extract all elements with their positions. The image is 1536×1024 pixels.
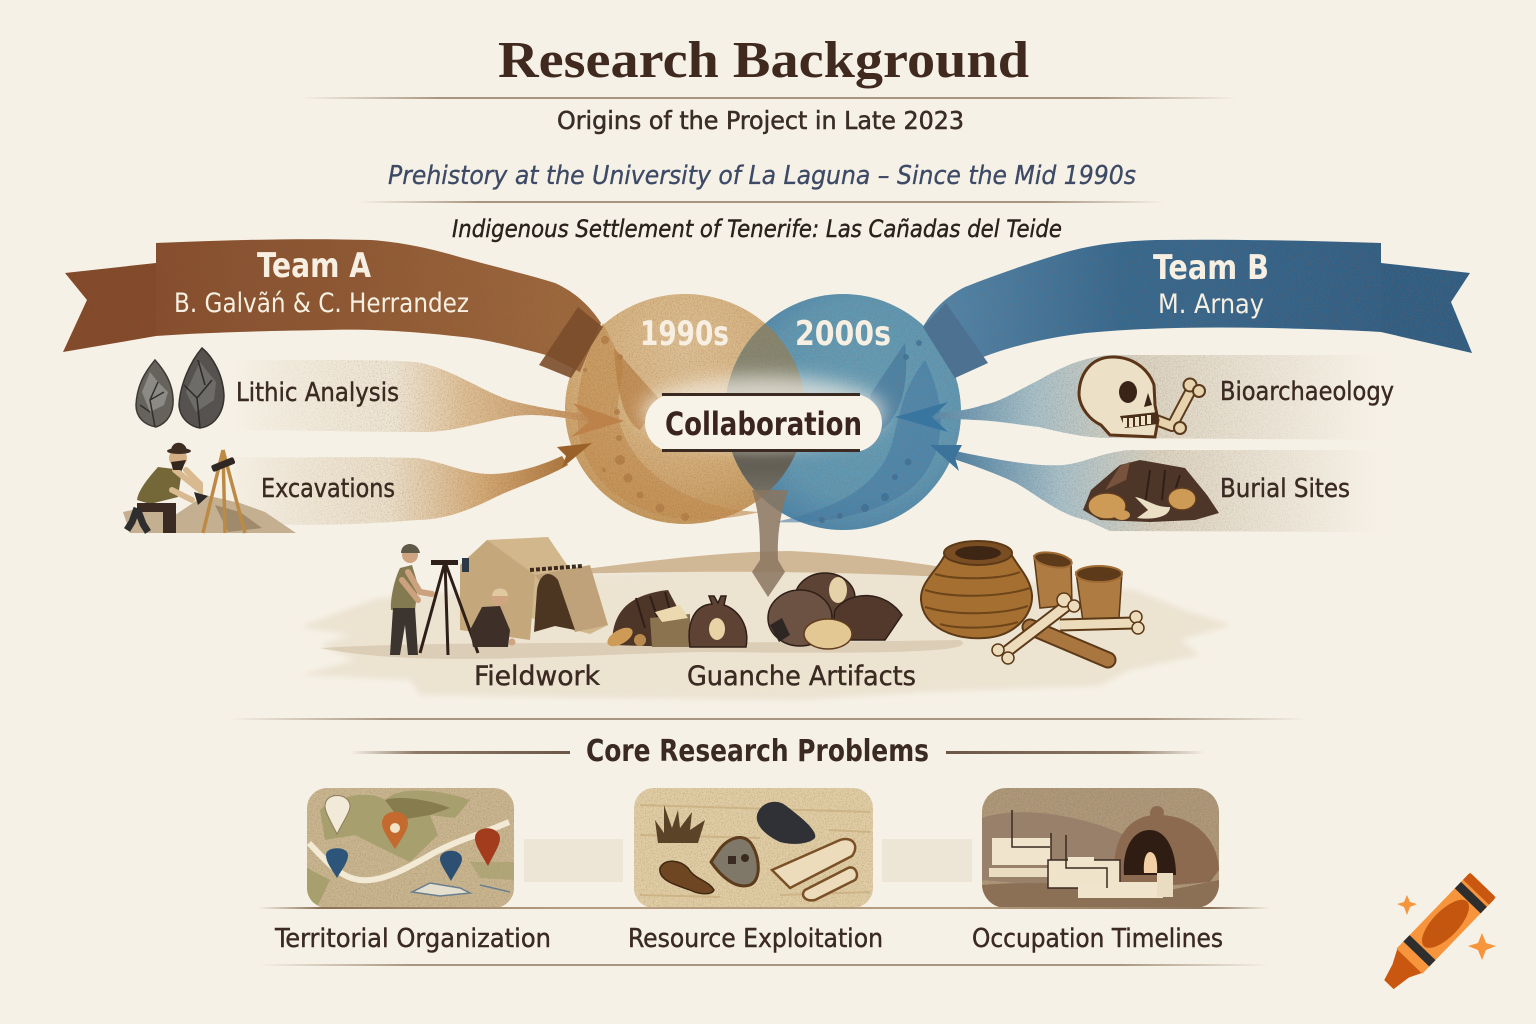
section heading: core research problems: Core Research Problems — [586, 734, 929, 769]
team B name: Team B — [1153, 248, 1269, 288]
map pin: red — [475, 828, 500, 866]
label: resource exploitation: Resource Exploitation — [628, 924, 883, 954]
label: territorial organization: Territorial Organization — [274, 924, 551, 954]
year: 1990s: 1990s — [640, 314, 729, 354]
context line: prehistory at La Laguna: Prehistory at the University of La Laguna – Since the Mid 1990s — [388, 161, 1136, 191]
arrow band: excavations — [234, 443, 592, 525]
subtitle: Origins of the Project in Late 2023 — [557, 106, 964, 135]
icon: burial mound — [1083, 460, 1219, 522]
label: burial sites: Burial Sites — [1220, 474, 1350, 504]
title: Research Background — [498, 32, 1029, 89]
label: bioarchaeology: Bioarchaeology — [1220, 377, 1394, 407]
distant hill — [530, 551, 1005, 580]
right input arrows — [895, 355, 1384, 532]
arrow: collaboration to fieldwork — [752, 490, 788, 597]
left input arrows — [230, 360, 624, 525]
label: guanche artifacts: Guanche Artifacts — [687, 661, 916, 692]
icon: plant — [655, 805, 705, 843]
circle overlap — [726, 324, 804, 497]
sandy ground — [300, 560, 1232, 700]
team B members: M. Arnay — [1158, 289, 1264, 320]
icon: excavating archaeologist — [123, 443, 296, 533]
venn circles — [565, 294, 961, 530]
label: excavations: Excavations — [261, 474, 395, 504]
surveyor with tripod — [390, 544, 478, 655]
arrow band: burial sites — [930, 445, 1384, 532]
map pin: white — [325, 796, 350, 834]
circle: 1990s — [565, 294, 805, 524]
label: lithic analysis: Lithic Analysis — [236, 378, 399, 408]
circle: 2000s — [725, 294, 961, 530]
team A members: B. Galvãń & C. Herrandez — [174, 288, 469, 319]
icon: ore stone — [711, 838, 758, 886]
guanche artifacts group — [604, 573, 902, 650]
context line: Tenerife settlement: Indigenous Settlement of Tenerife: Las Cañadas del Teide — [452, 215, 1062, 243]
connector: resources to timelines — [882, 839, 972, 882]
map pin: blue east — [440, 851, 462, 881]
icon: timeline blocks — [989, 810, 1173, 898]
map pin: blue west — [326, 848, 348, 878]
icon: bone scrolls — [772, 839, 857, 900]
panel: resource exploitation — [634, 788, 873, 908]
collaboration label: Collaboration — [665, 405, 862, 443]
icon: cave dwelling — [1114, 806, 1219, 885]
map pin: orange — [382, 812, 408, 849]
label: occupation timelines: Occupation Timelines — [972, 924, 1223, 954]
label: fieldwork: Fieldwork — [474, 661, 600, 692]
section heading: core research problems — [350, 734, 1205, 769]
tent — [460, 537, 608, 640]
collaboration pill — [645, 393, 882, 452]
arrow band: bioarchaeology — [895, 355, 1384, 440]
icon: crayon with sparkles — [1375, 872, 1496, 996]
pottery and bones — [921, 541, 1144, 664]
ground shadow — [320, 640, 963, 659]
icon: gourd — [660, 861, 714, 894]
arrow band: lithic analysis — [230, 360, 624, 437]
team A name: Team A — [257, 246, 371, 286]
icon: obsidian rock — [757, 802, 815, 844]
panel: occupation timelines — [982, 788, 1219, 908]
fieldwork and artifacts scene — [300, 490, 1232, 700]
year: 2000s: 2000s — [795, 314, 891, 354]
kneeling worker — [470, 588, 516, 647]
team B ribbon — [923, 240, 1472, 378]
icon: lithic stones — [136, 348, 224, 428]
connector: map to resources — [524, 839, 623, 882]
icon: skull and bone — [1079, 357, 1205, 437]
panel: territorial organization map — [307, 788, 514, 908]
team A ribbon — [63, 239, 603, 378]
glow behind label — [641, 376, 885, 448]
